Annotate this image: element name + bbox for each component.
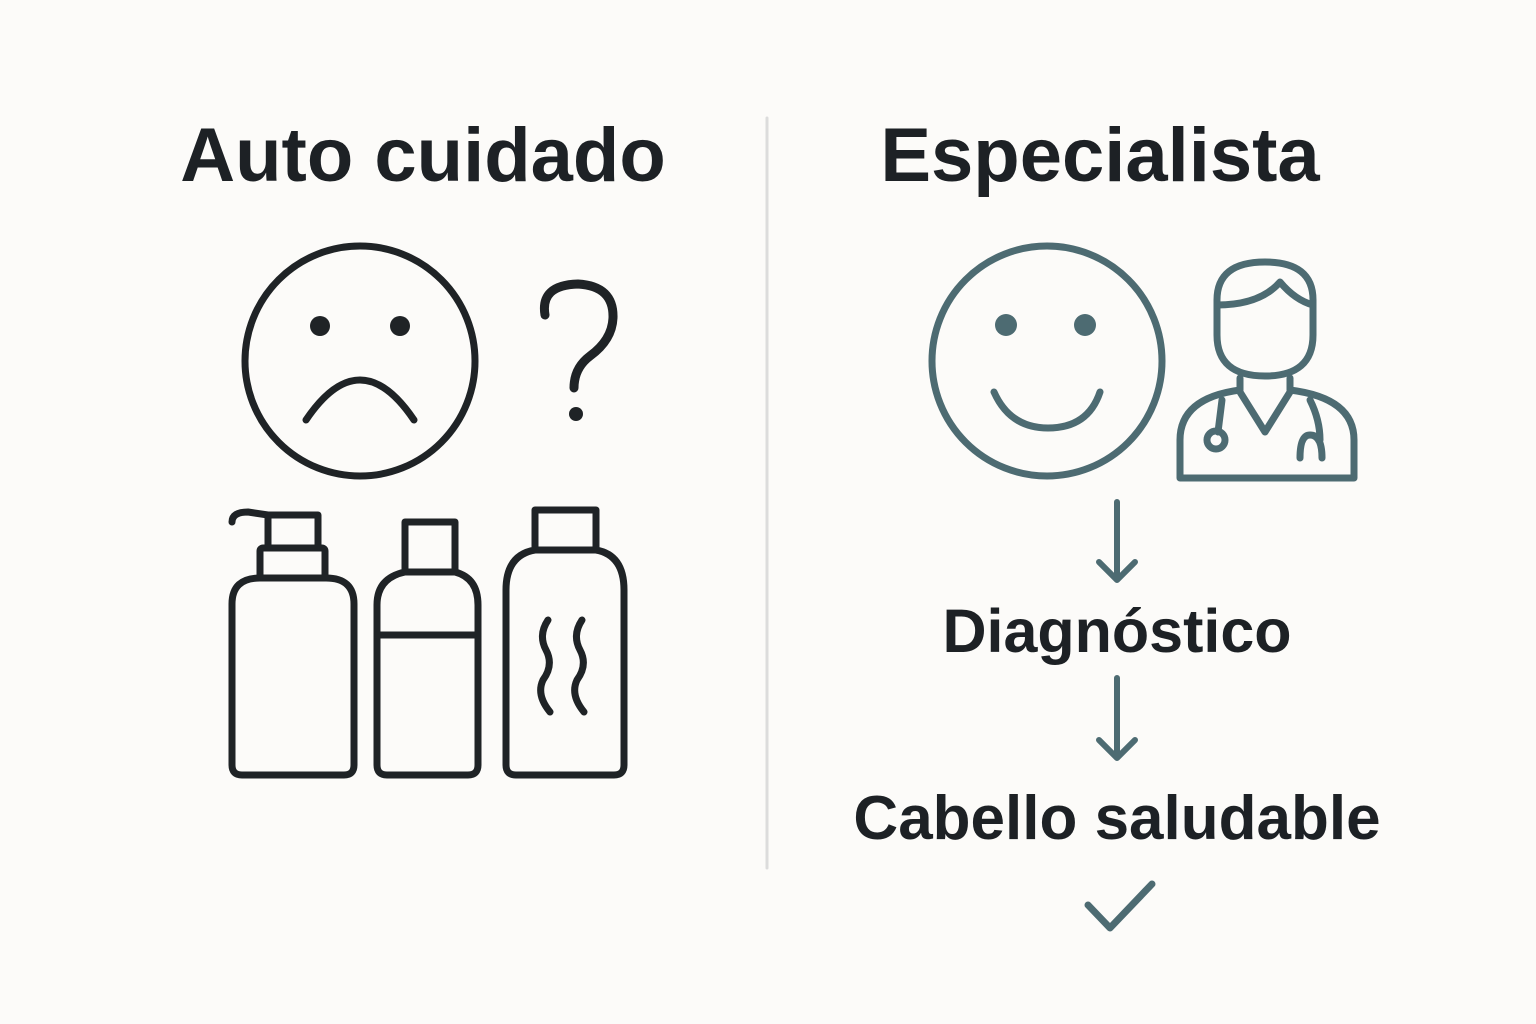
icon: check [1088,884,1152,928]
label: Cabello saludable: Cabello saludable [853,784,1381,853]
title: Especialista: Especialista [880,113,1320,198]
icon: question mark [544,284,613,421]
label: Diagnóstico: Diagnóstico [942,597,1292,665]
icon: doctor [1180,262,1354,478]
arrow 1 [1099,502,1135,580]
arrow 2 [1099,678,1135,758]
icon: happy face [932,246,1162,476]
title: Auto cuidado: Auto cuidado [180,113,666,198]
icon: bottles [232,510,624,775]
icon: sad face [245,246,475,476]
